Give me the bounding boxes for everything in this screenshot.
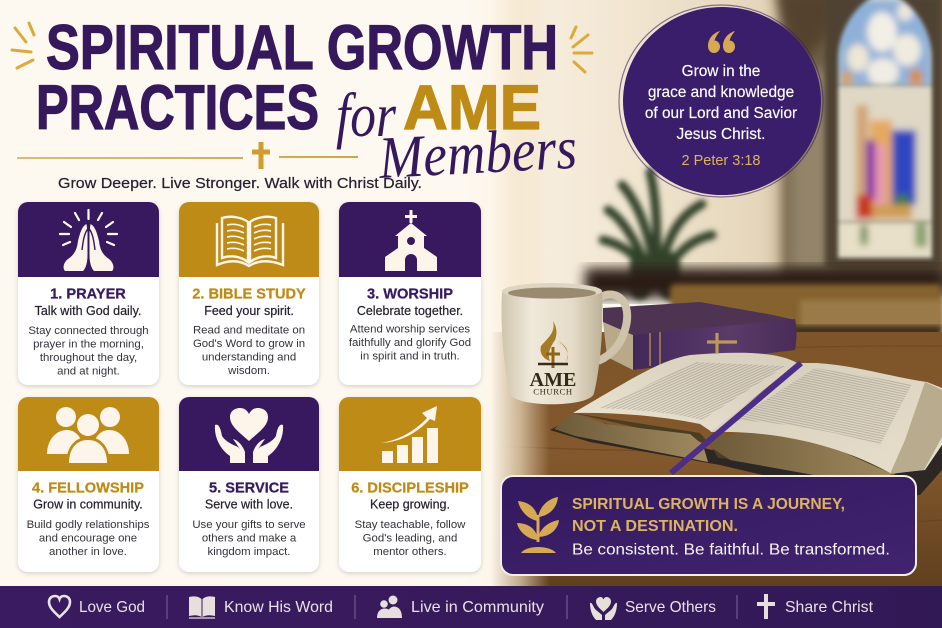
card description: in spirit and in truth. <box>360 350 460 362</box>
icon: quotation marks <box>708 31 735 53</box>
card subtitle: Talk with God daily. <box>35 304 141 318</box>
card description: kingdom impact. <box>208 546 290 558</box>
card description: Stay connected through <box>28 325 149 337</box>
mug logo: AME Church flame and cross: AME <box>530 369 576 391</box>
icon: praying hands <box>60 210 117 271</box>
title word: AME: AME <box>403 73 541 143</box>
card subtitle: Serve with love. <box>205 498 293 512</box>
footer item: know his word <box>189 596 333 618</box>
callout heading: NOT A DESTINATION. <box>572 518 738 535</box>
footer item: live in community: Live in Community <box>411 599 544 616</box>
card heading: 3. WORSHIP <box>367 286 453 302</box>
card description: prayer in the morning, <box>33 338 144 350</box>
divider with gold cross <box>17 142 358 169</box>
mug logo: AME Church flame and cross <box>530 321 576 396</box>
card description: others and make a <box>202 532 297 544</box>
callout: journey message <box>501 476 916 575</box>
card description: wisdom. <box>227 365 270 377</box>
card 4: fellowship <box>18 397 159 572</box>
card description <box>193 324 305 377</box>
card heading: 1. PRAYER <box>50 286 126 302</box>
photo: AME church coffee mug <box>501 283 627 404</box>
script word: Members: Members <box>376 115 578 191</box>
footer item: share christ <box>757 594 874 619</box>
scripture circle <box>619 5 823 197</box>
card description <box>27 519 150 558</box>
mug logo: AME Church flame and cross: CHURCH <box>533 386 573 396</box>
card 2: bible study <box>179 202 319 385</box>
verse text: Grow in the <box>682 63 760 80</box>
card 6: discipleship <box>339 397 481 572</box>
card subtitle: Feed your spirit. <box>204 304 294 318</box>
callout heading <box>572 496 845 535</box>
card description: and at night. <box>57 366 120 378</box>
card description: throughout the day, <box>40 352 137 364</box>
card 5: service <box>179 397 319 572</box>
card heading: 2. BIBLE STUDY <box>192 286 306 302</box>
card subtitle: Keep growing. <box>370 498 450 512</box>
title <box>36 13 578 191</box>
verse reference: 2 Peter 3:18 <box>682 153 760 169</box>
icon: growing plant <box>517 497 559 553</box>
card 3: worship <box>339 202 481 385</box>
card description: another in love. <box>49 546 127 558</box>
card heading: 4. FELLOWSHIP <box>32 480 144 496</box>
footer item: love god: Love God <box>79 599 145 616</box>
footer item: know his word: Know His Word <box>224 599 333 616</box>
verse text: Jesus Christ. <box>677 126 765 143</box>
title line: Practices: PRACTICES <box>36 73 319 143</box>
callout heading: SPIRITUAL GROWTH IS A JOURNEY, <box>572 496 845 513</box>
card description <box>355 519 466 558</box>
footer item: live in community <box>377 596 544 618</box>
footer item: love god <box>49 596 145 617</box>
card description: God's Word to grow in <box>193 338 305 350</box>
card subtitle: Grow in community. <box>33 498 143 512</box>
plant <box>603 172 712 290</box>
verse text <box>645 63 797 143</box>
card heading: 5. SERVICE <box>209 480 289 496</box>
card description <box>192 519 306 558</box>
footer bar <box>0 586 942 628</box>
icon: open book <box>217 217 283 266</box>
card description <box>28 325 149 378</box>
card description: Use your gifts to serve <box>192 519 306 531</box>
icon: hands holding heart <box>215 408 283 463</box>
photo: purple closed bible <box>603 302 796 370</box>
card description: Stay teachable, follow <box>355 519 466 531</box>
footer item: share christ: Share Christ <box>785 599 874 616</box>
card description: Build godly relationships <box>27 519 150 531</box>
card description: God's leading, and <box>363 532 457 544</box>
footer item: serve others: Serve Others <box>625 599 716 616</box>
card subtitle: Celebrate together. <box>357 304 463 318</box>
card description: faithfully and glorify God <box>349 337 471 349</box>
verse text: grace and knowledge <box>648 84 794 101</box>
decorative rays right <box>571 27 592 72</box>
icon: three people <box>47 407 129 465</box>
card description: understanding and <box>202 352 296 364</box>
icon: church <box>385 210 437 271</box>
icon: rising bar chart <box>381 406 438 463</box>
card 1: prayer <box>18 202 159 385</box>
title line: Spiritual Growth: SPIRITUAL GROWTH <box>46 13 558 83</box>
tagline: Grow Deeper. Live Stronger. Walk with Christ Daily. <box>58 176 422 192</box>
verse text: of our Lord and Savior <box>645 105 797 122</box>
card description <box>349 324 471 362</box>
background: blurred church interior photo <box>491 0 942 586</box>
footer item: serve others <box>590 597 716 620</box>
card description: mentor others. <box>373 546 447 558</box>
stained glass window <box>825 0 942 267</box>
photo: open bible with ribbon <box>550 353 942 498</box>
card description: Read and meditate on <box>193 324 305 336</box>
card description: and encourage one <box>39 532 137 544</box>
decorative rays left <box>12 23 34 68</box>
script word: for: for <box>336 82 397 150</box>
card description: Attend worship services <box>350 324 470 336</box>
callout text: Be consistent. Be faithful. Be transformed. <box>572 542 890 558</box>
card heading: 6. DISCIPLESHIP <box>351 480 469 496</box>
